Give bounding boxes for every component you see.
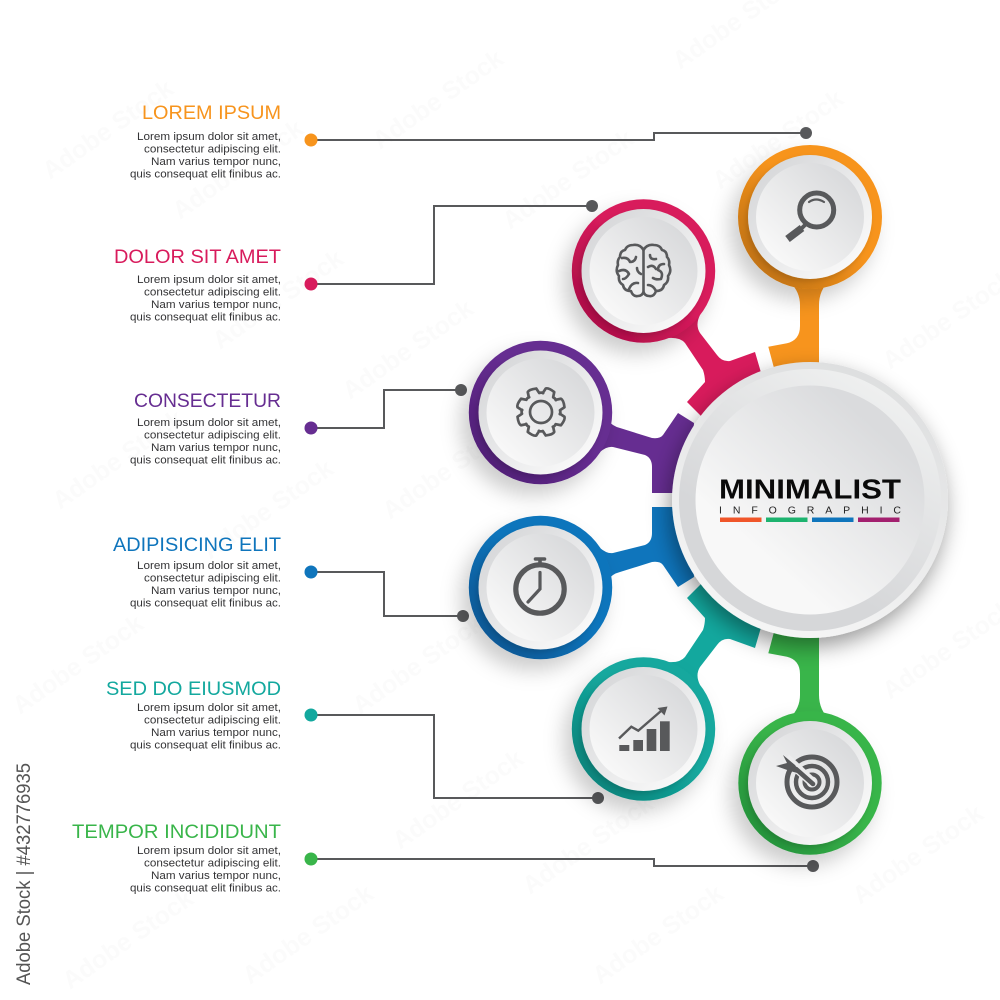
text block: sed do eiusmod: quis consequat elit finibus ac. [130, 740, 281, 752]
leader line 1 [304, 127, 812, 146]
watermark pattern: Adobe Stock [517, 789, 659, 900]
icon: magnifying glass [788, 193, 834, 239]
text block: adipisicing elit: ADIPISICING ELIT [113, 535, 281, 556]
watermark pattern: Adobe Stock [847, 799, 989, 910]
text block: tempor incididunt: quis consequat elit finibus ac. [130, 882, 281, 894]
text block: adipisicing elit: Nam varius tempor nunc, [151, 585, 281, 597]
node: stopwatch [469, 516, 612, 659]
text block: tempor incididunt [72, 822, 281, 894]
central circle [672, 362, 948, 638]
watermark pattern: Adobe Stock [47, 404, 189, 515]
text block: tempor incididunt: Nam varius tempor nunc, [151, 870, 281, 882]
icon: bar chart with arrow [619, 706, 670, 751]
text block: consectetur [130, 391, 281, 466]
node: growth chart [572, 657, 715, 801]
connector: orange [768, 280, 830, 368]
connector: purple [600, 413, 694, 493]
text block: tempor incididunt: consectetur adipiscing elit. [144, 858, 281, 870]
leader line 6 [304, 852, 819, 872]
text block: lorem ipsum: consectetur adipiscing elit. [144, 144, 281, 156]
title: MINIMALIST [719, 474, 901, 504]
text block: dolor sit amet: consectetur adipiscing elit. [144, 286, 281, 298]
connector: teal [668, 582, 762, 685]
text block: dolor sit amet: quis consequat elit finibus ac. [130, 312, 281, 324]
node: brain [572, 199, 715, 343]
text block: tempor incididunt: Lorem ipsum dolor sit amet, [137, 845, 281, 857]
text block: lorem ipsum: LOREM IPSUM [142, 103, 281, 124]
icon: gear [515, 386, 567, 438]
stock credit text: Adobe Stock | #432776935 [14, 763, 35, 985]
leader line 4 [304, 566, 469, 622]
text block: adipisicing elit: quis consequat elit finibus ac. [130, 598, 281, 610]
watermark pattern: Adobe Stock [237, 879, 379, 990]
leader line 3 [304, 384, 467, 434]
node: magnifier [738, 145, 882, 289]
text block: lorem ipsum: quis consequat elit finibus ac. [130, 168, 281, 180]
icon: stopwatch [516, 559, 564, 613]
leader line 5 [304, 708, 604, 804]
leader line 2 [304, 200, 598, 290]
text block: dolor sit amet: DOLOR SIT AMET [114, 247, 281, 268]
text block: lorem ipsum: Lorem ipsum dolor sit amet, [137, 131, 281, 143]
text block: lorem ipsum [130, 103, 281, 180]
watermark pattern: Adobe Stock [707, 84, 849, 195]
text block: sed do eiusmod: Lorem ipsum dolor sit amet, [137, 702, 281, 714]
icon: brain [617, 245, 670, 296]
node: gear [469, 341, 612, 484]
connector: blue [600, 507, 694, 587]
watermark pattern: Adobe Stock [367, 44, 509, 155]
text block: dolor sit amet [114, 247, 281, 324]
icon: target with arrow [776, 755, 837, 807]
text block: sed do eiusmod [106, 679, 281, 752]
watermark pattern: Adobe Stock [337, 294, 479, 405]
text block: consectetur: CONSECTETUR [134, 391, 281, 412]
watermark pattern: Adobe Stock [7, 609, 149, 720]
colour bars [720, 518, 900, 522]
watermark pattern: Adobe Stock [497, 124, 639, 235]
text block: adipisicing elit [113, 535, 281, 610]
watermark pattern: Adobe Stock [57, 884, 199, 995]
text block: consectetur: Lorem ipsum dolor sit amet, [137, 417, 281, 429]
text block: tempor incididunt: TEMPOR INCIDIDUNT [72, 822, 281, 843]
text block: dolor sit amet: Lorem ipsum dolor sit amet, [137, 274, 281, 286]
watermark pattern: Adobe Stock [377, 414, 519, 525]
text block: consectetur: Nam varius tempor nunc, [151, 442, 281, 454]
watermark pattern: Adobe Stock [197, 454, 339, 565]
text block: sed do eiusmod: SED DO EIUSMOD [106, 679, 281, 700]
watermark pattern: Adobe Stock [587, 879, 729, 990]
watermark pattern: Adobe Stock [347, 609, 489, 720]
text block: consectetur: quis consequat elit finibus ac. [130, 454, 281, 466]
watermark pattern: Adobe Stock [387, 744, 529, 855]
node: target [738, 711, 882, 855]
text block: consectetur: consectetur adipiscing elit. [144, 430, 281, 442]
text block: sed do eiusmod: consectetur adipiscing elit. [144, 714, 281, 726]
text block: dolor sit amet: Nam varius tempor nunc, [151, 299, 281, 311]
text block: adipisicing elit: Lorem ipsum dolor sit amet, [137, 560, 281, 572]
text block: lorem ipsum: Nam varius tempor nunc, [151, 156, 281, 168]
subtitle: INFOGRAPHIC [719, 504, 901, 516]
watermark pattern: Adobe Stock [167, 114, 309, 225]
text block: sed do eiusmod: Nam varius tempor nunc, [151, 727, 281, 739]
watermark pattern: Adobe Stock [37, 74, 179, 185]
watermark pattern: Adobe Stock [207, 244, 349, 355]
connector: green [768, 632, 830, 720]
connector: crimson [668, 315, 762, 418]
text block: adipisicing elit: consectetur adipiscing elit. [144, 572, 281, 584]
